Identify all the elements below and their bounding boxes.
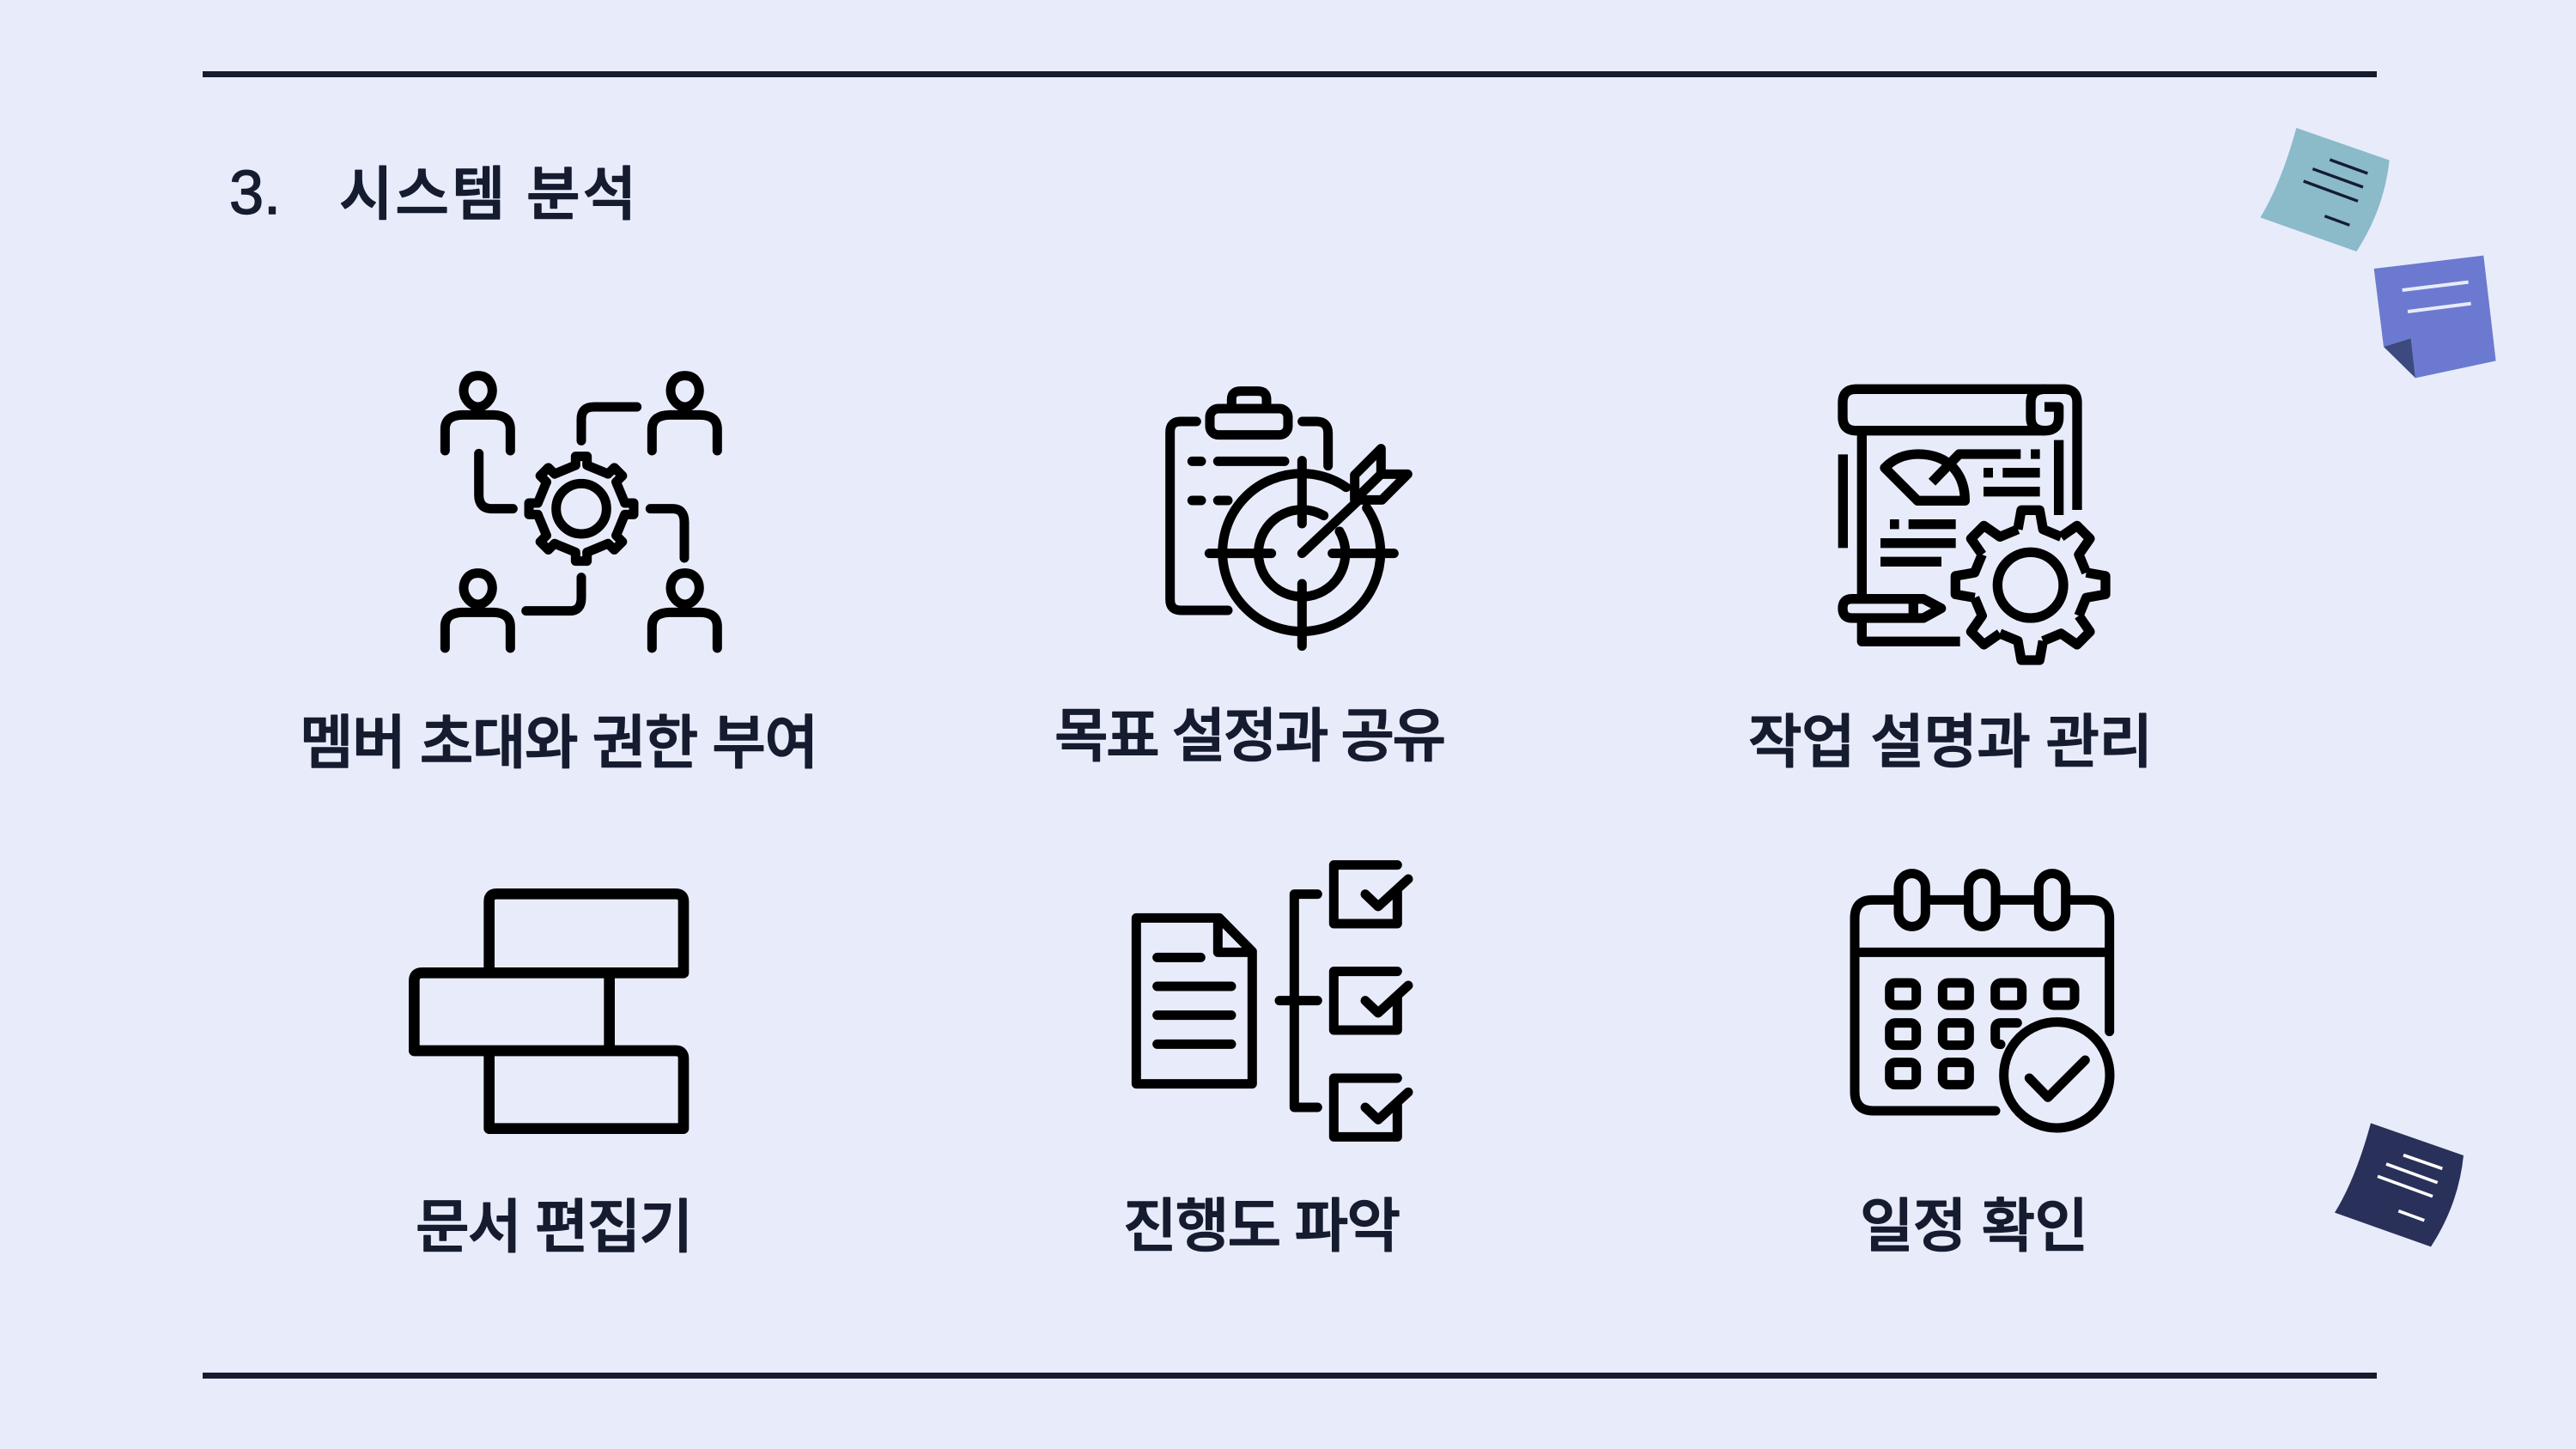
title: 시스템 분석: [339, 162, 636, 227]
label: schedule check: 일정 확인: [1860, 1194, 2088, 1259]
icon: team members around gear: [445, 376, 717, 648]
label: progress tracking: 진행도 파악: [1123, 1194, 1400, 1259]
icon: document editor blocks: [414, 894, 683, 1129]
sticky note: blue with folded corner: [2374, 256, 2496, 378]
icon: document and checklist: [1136, 865, 1408, 1137]
label: goal setting: 목표 설정과 공유: [1054, 704, 1446, 769]
icon: calendar with check: [1855, 874, 2110, 1128]
title: 3.: [229, 159, 281, 227]
label: document editor: 문서 편집기: [416, 1195, 693, 1260]
label: task description: 작업 설명과 관리: [1748, 710, 2153, 775]
label: member invitation: 멤버 초대와 권한 부여: [300, 711, 818, 776]
icon: clipboard and target: [1170, 391, 1407, 646]
icon: scroll document and gear: [1843, 389, 2105, 660]
sticky note: navy: [2335, 1123, 2464, 1246]
title: [229, 159, 636, 227]
sticky note: teal: [2260, 128, 2390, 252]
